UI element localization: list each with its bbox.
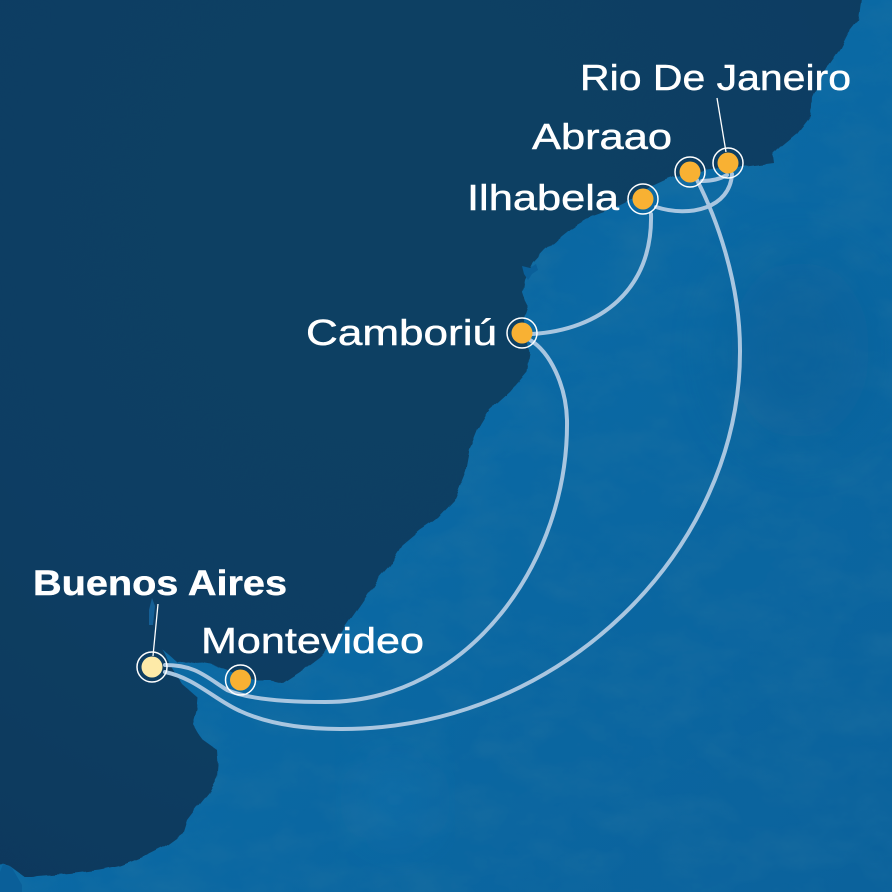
small coastal details	[0, 264, 538, 892]
route: Ilhabela to Rio De Janeiro	[656, 174, 732, 211]
port marker: Buenos Aires	[137, 652, 167, 682]
route: Buenos Aires to Abraao	[165, 180, 740, 729]
label: Ilhabela: Ilhabela	[467, 177, 620, 218]
label: Camboriú: Camboriú	[306, 312, 497, 353]
leader line: Rio De Janeiro	[717, 98, 726, 152]
port marker: Ilhabela	[628, 184, 658, 214]
port marker: Rio De Janeiro	[713, 148, 743, 178]
label: Abraao: Abraao	[532, 116, 672, 157]
route: Camboriú to Ilhabela	[532, 214, 651, 334]
port marker: Montevideo	[226, 665, 256, 695]
route: Buenos Aires to Camboriú via Montevideo	[165, 340, 567, 702]
route: Abraao to Rio De Janeiro	[702, 175, 727, 181]
port marker: Abraao	[675, 157, 705, 187]
label: Montevideo: Montevideo	[201, 620, 424, 661]
label: Rio De Janeiro: Rio De Janeiro	[580, 57, 851, 98]
leader line: Buenos Aires	[153, 604, 158, 656]
label: Buenos Aires: Buenos Aires	[33, 564, 287, 603]
route lines	[165, 174, 740, 729]
port marker: Camboriú	[507, 318, 537, 348]
